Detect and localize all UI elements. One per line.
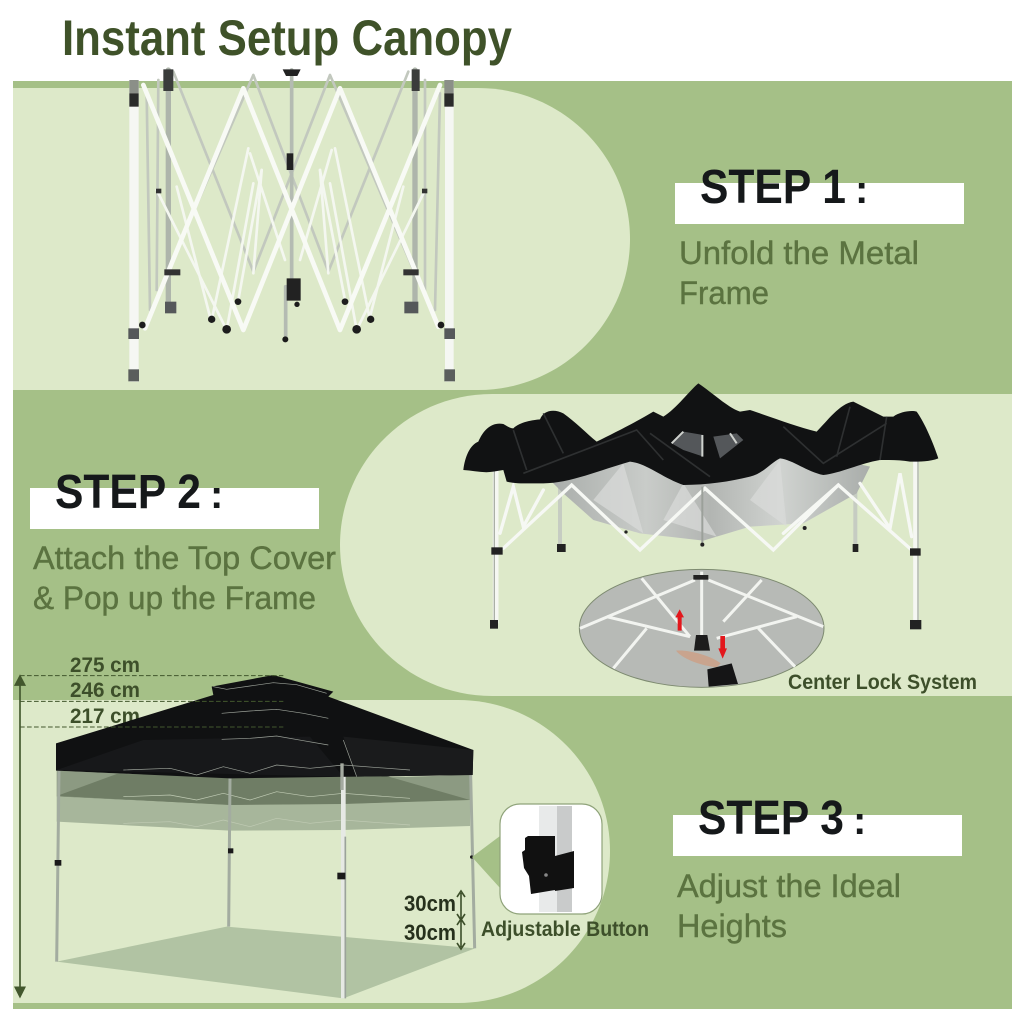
step 1 heading: : [855, 168, 868, 212]
silver underside [550, 447, 870, 541]
step 2 description: Attach the Top Cover [33, 540, 336, 576]
front legs [496, 460, 916, 623]
step 2 description: & Pop up the Frame [33, 580, 316, 616]
callout: adjustable button [472, 804, 602, 914]
height labels: 275 cm [70, 654, 140, 677]
lowest height band [57, 797, 470, 831]
black roof [56, 675, 473, 778]
sleeve [707, 663, 738, 687]
title: Instant Setup Canopy [62, 10, 512, 66]
center lock detail [579, 569, 824, 687]
height arrow [15, 676, 25, 997]
height adjustment labels: 30cm [404, 920, 456, 945]
hand [676, 650, 721, 667]
height labels: 217 cm [70, 705, 140, 728]
scissor arms [500, 473, 912, 550]
icon: down arrow [718, 636, 727, 659]
step 2 description [33, 540, 336, 616]
callout wedge [472, 836, 500, 888]
icon: lock knob [694, 635, 710, 651]
illustration: unfolded metal frame [128, 69, 455, 382]
step 1 description: Unfold the Metal [679, 235, 919, 271]
center pole [286, 70, 292, 340]
legs [57, 763, 475, 998]
ground shadow [57, 927, 475, 998]
corner legs [128, 69, 455, 382]
icon: up arrow [675, 609, 684, 631]
step 2 heading: : [210, 473, 223, 517]
dashed height guides [20, 676, 283, 727]
step 3 description [677, 868, 901, 944]
leg buttons [55, 848, 473, 879]
step 3 heading: : [853, 799, 866, 843]
step 1 heading [675, 161, 964, 224]
step 1 description [679, 235, 919, 311]
black cover [463, 383, 938, 485]
adjustable button label: Adjustable Button [481, 918, 649, 941]
illustration: frame with top cover [463, 383, 938, 629]
step 3 heading [673, 792, 962, 856]
height adjustment labels [404, 891, 465, 949]
panel: step 2 background [340, 394, 1012, 696]
step 3 description: Heights [677, 908, 787, 944]
front scissor arms [143, 85, 440, 330]
step 1 heading: STEP 1 [700, 161, 846, 214]
height labels: 246 cm [70, 679, 140, 702]
middle height band [57, 771, 470, 805]
step 3 description: Adjust the Ideal [677, 868, 901, 904]
height adjustment labels: 30cm [404, 891, 456, 916]
step 3 heading: STEP 3 [698, 792, 844, 845]
back legs [560, 480, 855, 548]
center lock label: Center Lock System [788, 671, 977, 694]
step 2 heading [30, 466, 319, 529]
step 2 heading: STEP 2 [55, 466, 201, 519]
height labels [70, 654, 140, 728]
illustration: assembled canopy [15, 675, 475, 998]
panel: step 1 background [13, 88, 630, 390]
panel: step 3 background [13, 700, 610, 1003]
step 1 description: Frame [679, 275, 769, 311]
wave lines [123, 792, 410, 827]
